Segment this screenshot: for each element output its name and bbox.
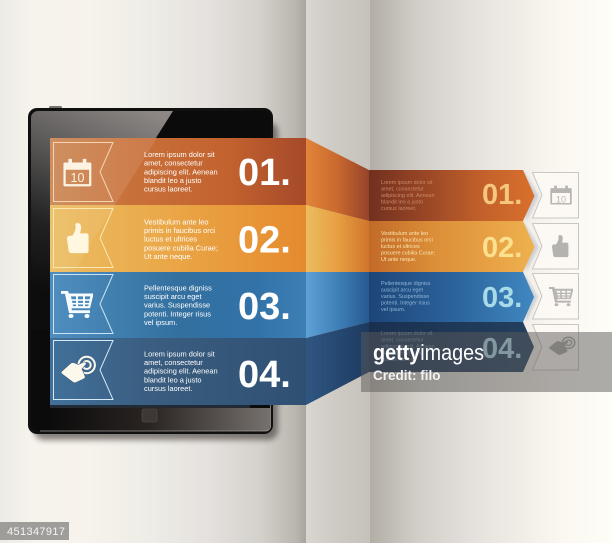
ribbon 1, orange: [50, 138, 534, 221]
right text block 1: adipiscing elit. Aenean: [381, 193, 435, 199]
number 02: 02.: [238, 220, 291, 262]
background: left page: [0, 0, 306, 543]
image id tag: 451347917: [7, 526, 65, 538]
right icon: shopping cart: [549, 287, 573, 306]
right text block 3: vel ipsum.: [381, 307, 405, 313]
text block 4: blandit leo a justo: [144, 375, 202, 384]
right text block 4: Lorem ipsum dolor sit: [381, 331, 433, 337]
arrow shadows behind the ribbons: [523, 170, 539, 322]
text block 4: amet, consectetur: [144, 358, 203, 367]
right icon: touch hand: [549, 337, 575, 355]
right chevron box 4: [532, 324, 578, 370]
left chevron tag 1: [54, 142, 113, 202]
tablet device: [28, 106, 278, 440]
number 03: 03.: [238, 286, 291, 328]
text block 4: Lorem ipsum dolor sit: [144, 350, 215, 358]
text block 3: suscipit arcu eget: [144, 292, 202, 301]
text block 2: Vestibulum ante leo: [144, 218, 209, 226]
right text block 2: posuere cubilia Curae;: [381, 250, 435, 256]
ribbon 4, navy: [50, 322, 534, 405]
left chevron tag 2: [54, 208, 113, 268]
text block 1: cursus laoreet.: [144, 185, 192, 194]
text block 3: varius. Suspendisse: [144, 301, 210, 310]
text block 1: adipiscing elit. Aenean: [144, 167, 218, 176]
right text block 3: Pellentesque digniss: [381, 281, 431, 287]
right text block 4: adipiscing elit. Aenean: [381, 344, 435, 350]
ribbon 3, blue: [50, 272, 534, 338]
right number 02: 02.: [482, 232, 522, 264]
right text block 3: suscipit arcu eget: [381, 288, 423, 294]
number 04: 04.: [238, 354, 291, 396]
text block 2: primis in faucibus orci: [144, 226, 215, 235]
text block 1: amet, consectetur: [144, 159, 203, 168]
right icon: calendar: 10: [556, 194, 566, 204]
right chevron box 3: [532, 274, 578, 319]
right chevron box 1: [532, 172, 578, 218]
right text block 1: blandit leo a justo: [381, 200, 423, 206]
image id tag: [0, 522, 69, 540]
ribbon 2, amber: [50, 205, 534, 272]
right text block 4: cursus laoreet.: [381, 357, 416, 363]
icon: thumbs up: [67, 223, 89, 253]
left chevron tag 3: [54, 274, 113, 334]
right chevron box 2: [532, 224, 578, 269]
right text block 3: potenti. Integer risus: [381, 300, 430, 306]
right text block 2: Vestibulum ante leo: [381, 231, 428, 237]
number 01: 01.: [238, 152, 291, 194]
watermark credit: Credit: filo: [373, 368, 440, 383]
icon: shopping cart: [61, 291, 93, 318]
icon: touch hand: [61, 357, 95, 383]
text block 2: luctus et ultrices: [144, 235, 197, 244]
text block 3: potenti. Integer risus: [144, 309, 211, 318]
watermark logo: gettyimages: [373, 340, 484, 365]
text block 3: vel ipsum.: [144, 318, 177, 327]
right text block 2: Ut ante neque.: [381, 257, 416, 263]
right text block 1: Lorem ipsum dolor sit: [381, 180, 433, 186]
icon: calendar: [63, 159, 91, 186]
right icon: calendar: [550, 186, 572, 205]
left chevron tag 4: [54, 340, 113, 400]
watermark panel: [361, 332, 612, 392]
right number 03: 03.: [482, 282, 522, 314]
text block 4: adipiscing elit. Aenean: [144, 367, 218, 376]
text block 2: posuere cubilia Curae;: [144, 243, 218, 252]
right text block 2: luctus et ultrices: [381, 244, 420, 250]
right text block 1: cursus laoreet.: [381, 206, 416, 212]
right text block 2: primis in faucibus orci: [381, 238, 433, 244]
right icon: thumbs up: [552, 235, 568, 257]
text block 3: Pellentesque digniss: [144, 284, 212, 292]
right text block 4: amet, consectetur: [381, 338, 424, 344]
background: right page: [370, 0, 612, 543]
right number 01: 01.: [482, 179, 522, 211]
right text block 3: varius. Suspendisse: [381, 294, 429, 300]
text block 1: Lorem ipsum dolor sit: [144, 150, 215, 159]
right text block 1: amet, consectetur: [381, 186, 424, 192]
background: middle page: [306, 0, 370, 543]
icon: calendar: 10: [71, 171, 84, 185]
text block 2: Ut ante neque.: [144, 252, 192, 261]
right text block 4: blandit leo a justo: [381, 350, 423, 356]
text block 4: cursus laoreet.: [144, 384, 192, 393]
right number 04: 04.: [482, 333, 522, 365]
text block 1: blandit leo a justo: [144, 176, 202, 185]
